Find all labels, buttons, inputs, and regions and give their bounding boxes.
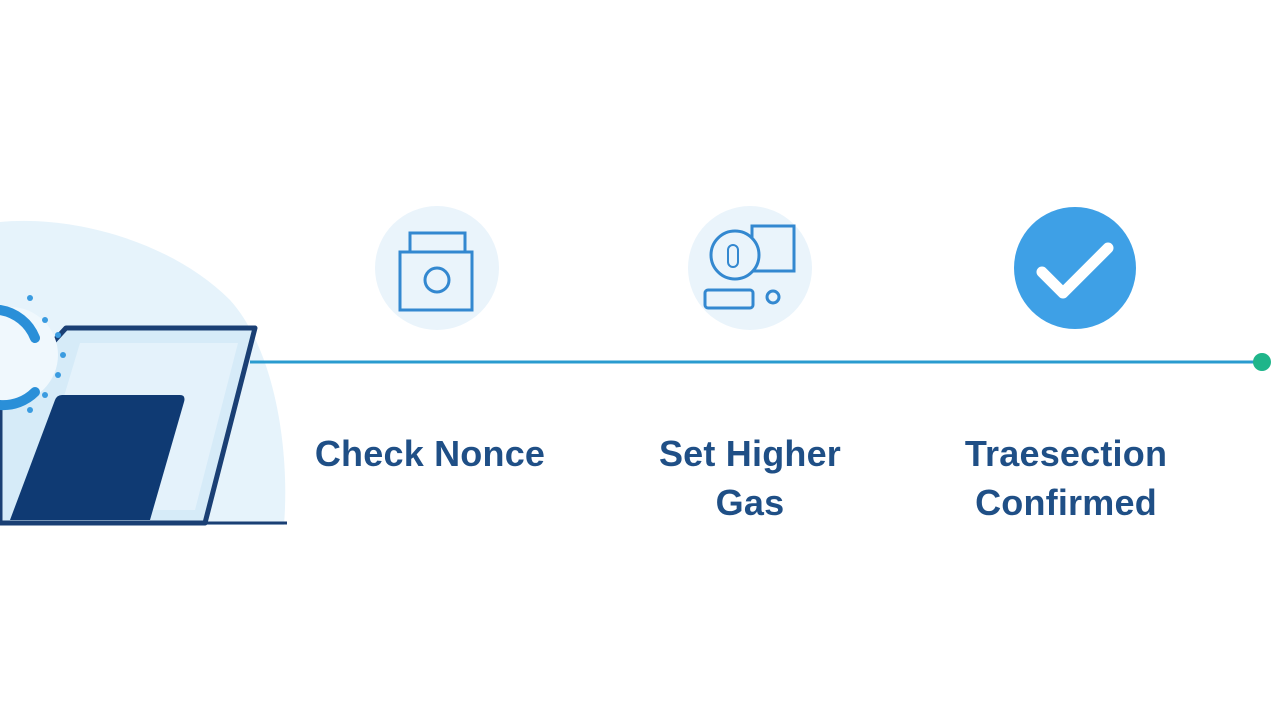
laptop	[0, 328, 287, 523]
label: transaction confirmed: Traesection	[965, 433, 1167, 474]
background blob	[0, 221, 285, 525]
icon: check nonce	[375, 206, 499, 330]
label: transaction confirmed	[965, 433, 1167, 523]
label: transaction confirmed: Confirmed	[975, 482, 1157, 523]
label: check nonce: Check Nonce	[315, 433, 545, 474]
icon: confirmed check	[1014, 207, 1136, 329]
gear	[0, 295, 66, 413]
label: set higher gas: Gas	[716, 482, 784, 523]
label: set higher gas: Set Higher	[659, 433, 841, 474]
label: set higher gas	[659, 433, 841, 523]
icon: set higher gas	[688, 206, 812, 330]
end dot	[1253, 353, 1271, 371]
timeline	[250, 360, 1262, 364]
